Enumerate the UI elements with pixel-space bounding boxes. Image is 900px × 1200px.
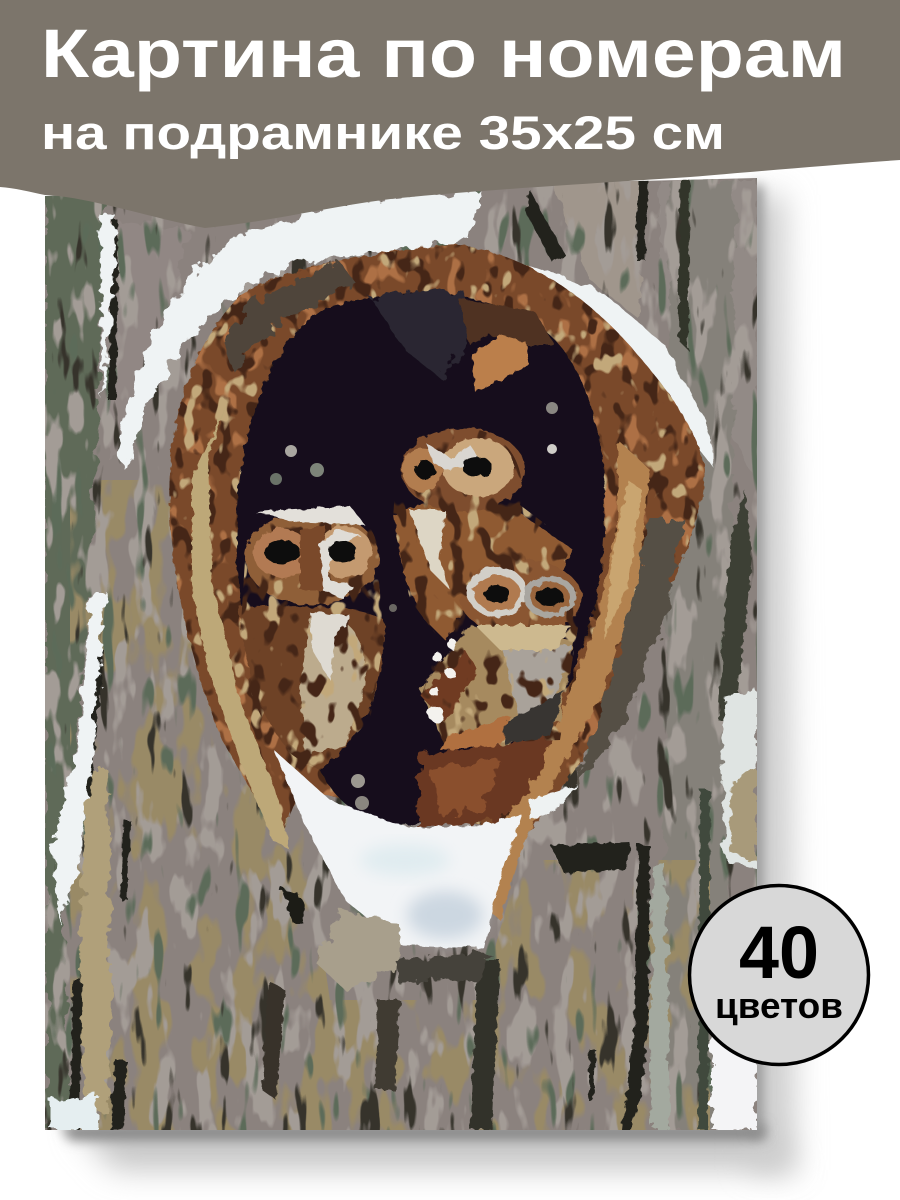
tan strip lower left	[78, 770, 112, 1120]
dark hollow interior	[236, 294, 605, 825]
owls	[235, 402, 585, 810]
owl plumage mottling	[235, 425, 585, 775]
hollow upper shadow	[370, 290, 468, 378]
rear owl face	[442, 438, 514, 496]
left tan rim strip	[192, 400, 290, 850]
bark base	[45, 170, 757, 1130]
rear owl	[393, 502, 573, 640]
snow below hollow	[274, 750, 522, 948]
subtitle: на подрамнике 35х25 см	[41, 106, 725, 159]
claw and dark bark under snow	[284, 890, 490, 990]
front owl lower shadow	[500, 690, 565, 745]
pale strip lower right	[650, 865, 670, 1128]
snow patch right of hollow	[530, 785, 578, 820]
painting: owls in tree hollow	[45, 170, 757, 1130]
lower hollow mottling	[430, 760, 500, 815]
left owl facial discs	[253, 529, 311, 577]
bark dark streaks	[70, 180, 752, 1130]
badge label: цветов	[715, 985, 843, 1026]
canvas shadow	[60, 185, 795, 1170]
front owl snow flecks	[428, 706, 444, 722]
badge number: 40	[739, 911, 819, 994]
tan panel on right edge	[730, 770, 757, 860]
dark bark right of hollow	[575, 520, 685, 785]
front owl face	[467, 567, 527, 617]
olive bark speckles	[70, 480, 710, 1130]
left owl chest highlight	[310, 612, 350, 680]
front owl body	[420, 625, 574, 745]
header band	[0, 0, 900, 228]
left owl head	[245, 511, 379, 605]
title: Картина по номерам	[41, 15, 846, 92]
snow patches	[50, 190, 757, 1130]
hollow rim wood	[130, 240, 720, 920]
right tan rim strip	[482, 440, 650, 920]
front owl head	[463, 570, 584, 627]
left green background strip	[45, 190, 104, 1130]
left owl body	[238, 605, 384, 770]
snowflakes in hollow	[270, 402, 558, 810]
lower hollow brown	[415, 735, 555, 825]
wood chip	[458, 298, 555, 392]
dark rim top left	[222, 262, 355, 370]
bark colour regions	[554, 179, 708, 318]
colour count badge	[690, 886, 868, 1064]
bark speckles	[45, 170, 757, 1130]
